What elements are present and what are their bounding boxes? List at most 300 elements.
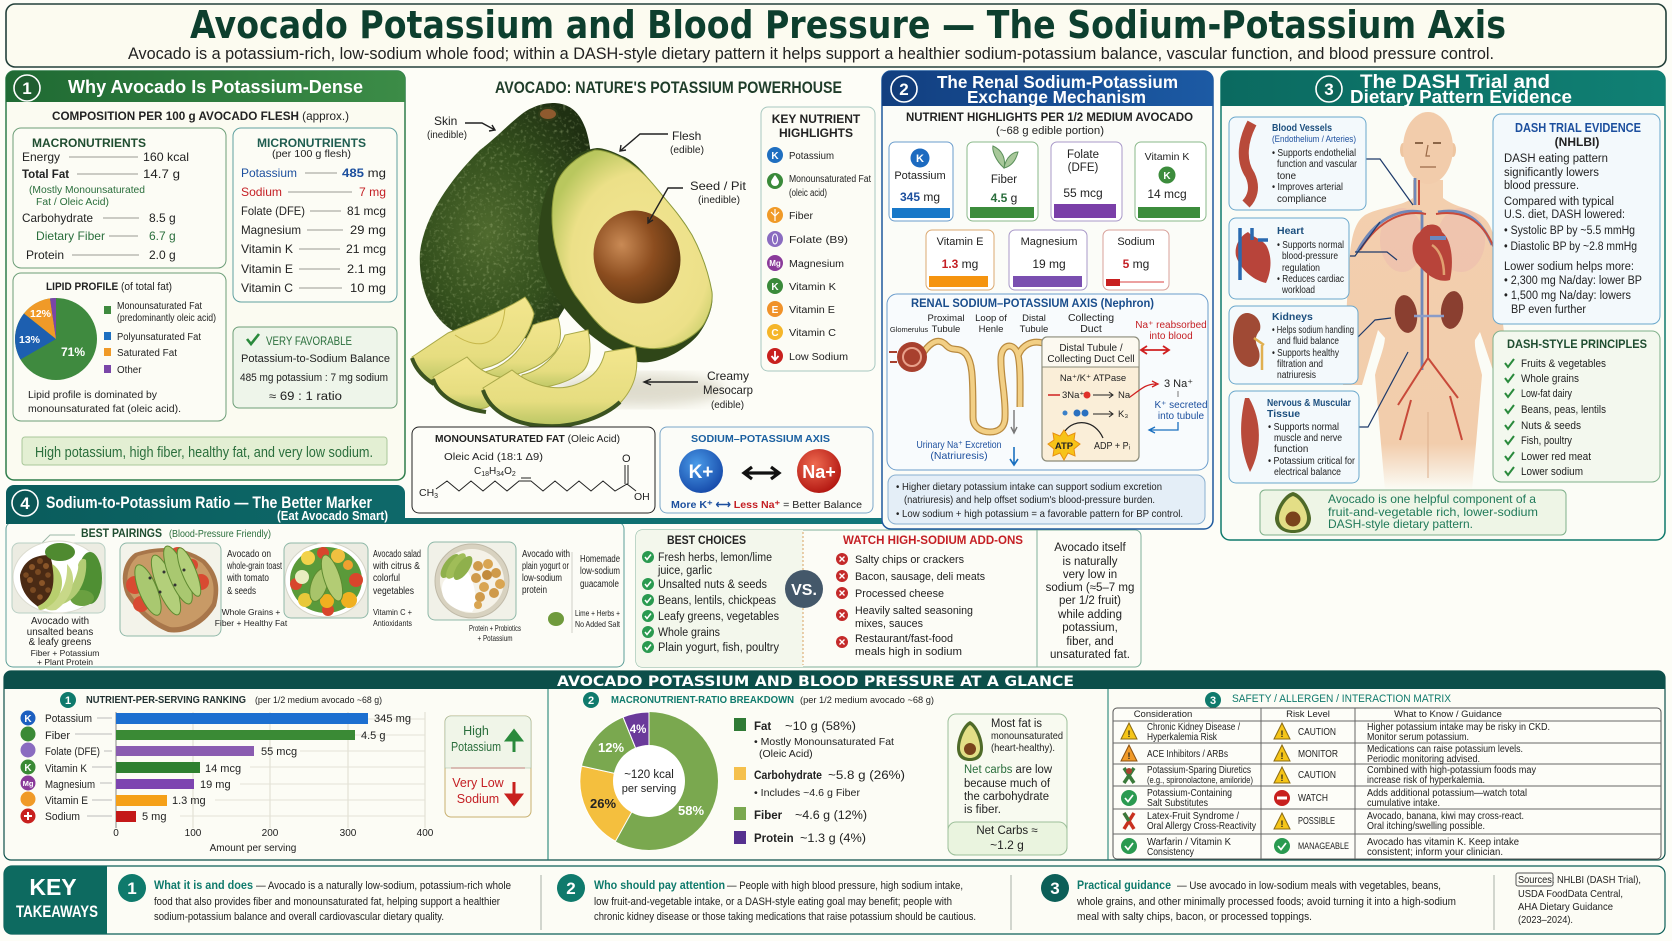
- safety matrix table: Consideration: [1134, 709, 1192, 720]
- avocado illustration: [412, 103, 725, 426]
- DASH-style principles: Fish, poultry: [1521, 435, 1572, 447]
- macronutrients table: 2.0 g: [149, 248, 176, 262]
- watch high-sodium list: WATCH HIGH-SODIUM ADD-ONS: [843, 535, 1023, 547]
- micronutrients table: (per 100 g flesh): [272, 148, 351, 160]
- icon: avocado: [957, 721, 983, 761]
- nephron diagram: Proximal: [928, 313, 964, 324]
- card: kidneys: • Supports healthy: [1272, 348, 1339, 359]
- card: heart: blood-pressure: [1282, 251, 1338, 262]
- card: blood vessels: [1229, 117, 1366, 210]
- food: beans, avocado and greens bowl: [12, 541, 105, 613]
- donut chart: macronutrients: 26%: [590, 796, 616, 811]
- avocado sodium note: per 1/2 fruit): [1059, 595, 1121, 607]
- card: nervous and muscular tissue: [1229, 391, 1359, 483]
- monounsaturated fat molecule: [412, 427, 655, 513]
- card: heart: [1229, 218, 1349, 299]
- card: potassium: [889, 142, 953, 221]
- macronutrients table: Energy: [22, 150, 60, 164]
- nutrient highlights heading: NUTRIENT HIGHLIGHTS PER 1/2 MEDIUM AVOCADO: [906, 110, 1193, 124]
- card: kidneys: and fluid balance: [1277, 336, 1339, 347]
- takeaway 1: [118, 874, 511, 923]
- row: salt substitutes: Adds additional potassium—watch total: [1367, 788, 1527, 799]
- bar chart: nutrients per serving: 300: [340, 828, 357, 839]
- DASH trial evidence card: (NHLBI): [1555, 135, 1599, 149]
- labels: ion movement: Urinary Na⁺ Excretion: [916, 439, 1002, 451]
- card: blood vessels: function and vascular: [1277, 159, 1358, 170]
- macronutrients table: Fat / Oleic Acid): [36, 197, 109, 208]
- caption: yogurt: plain yogurt or: [522, 561, 570, 572]
- avocado pattern banner: DASH-style dietary pattern.: [1328, 517, 1473, 531]
- labels: ion movement: into blood: [1149, 331, 1193, 342]
- safety matrix table: [1113, 708, 1661, 859]
- lipid profile pie chart: 13%: [19, 334, 41, 346]
- net carbs callout: Net Carbs ≈: [976, 825, 1038, 837]
- icon: ATP burst: ATP: [1055, 441, 1074, 452]
- key nutrient highlights: Potassium: [789, 151, 834, 162]
- nephron diagram: Loop of: [975, 313, 1007, 324]
- panel 3 header: Dietary Pattern Evidence: [1350, 86, 1572, 107]
- row: ACE inhibitors: MONITOR: [1298, 749, 1338, 760]
- net carbs callout: the carbohydrate: [964, 791, 1049, 803]
- row: salt substitutes: Salt Substitutes: [1147, 798, 1208, 809]
- nutrient ranking heading: (per 1/2 medium avocado ~68 g): [255, 695, 382, 706]
- row: ACE inhibitors: [1121, 744, 1523, 765]
- net carbs callout: monounsaturated: [991, 730, 1063, 742]
- connector lines to body: [1350, 159, 1413, 427]
- safety matrix heading: [1205, 692, 1452, 708]
- nutrient highlights heading: [906, 110, 1193, 137]
- row: latex-fruit syndrome: Oral itching/swelling possible.: [1367, 821, 1485, 832]
- very favorable ratio callout: Potassium-to-Sodium Balance: [241, 353, 390, 365]
- lipid profile pie chart: Monounsaturated Fat: [117, 301, 202, 312]
- caption: bowl: + Plant Protein: [37, 657, 93, 667]
- panel 3 header: [1221, 71, 1665, 107]
- lipid profile pie chart: (predominantly oleic acid): [117, 313, 216, 324]
- caption: salad: with citrus &: [372, 561, 420, 572]
- avocado sodium note: very low in: [1063, 569, 1117, 581]
- avocado pattern banner: [1260, 490, 1566, 535]
- monounsaturated fat molecule: 2: [512, 471, 516, 478]
- nephron diagram: Tubule: [932, 324, 960, 335]
- DASH-style principles: Beans, peas, lentils: [1521, 404, 1606, 416]
- micronutrients table: Sodium: [241, 185, 282, 199]
- card: nervous and muscular tissue: • Potassium critical for: [1268, 456, 1356, 467]
- bar chart: nutrients per serving: 5 mg: [142, 811, 166, 823]
- icon: vitamin K: [767, 278, 783, 294]
- macronutrient heading: (per 1/2 medium avocado ~68 g): [800, 695, 934, 706]
- very favorable ratio callout: ≈ 69 : 1 ratio: [269, 391, 342, 403]
- sodium-potassium axis: More K⁺ ⟷ Less Na⁺ = Better Balance: [671, 499, 862, 511]
- micronutrients table: 2.1 mg: [347, 262, 386, 276]
- card: kidneys: [1229, 306, 1358, 384]
- caption: salad: Antioxidants: [373, 618, 412, 628]
- key nutrient highlights: Low Sodium: [789, 352, 848, 363]
- caption: guacamole: Lime + Herbs +: [575, 608, 620, 618]
- DASH-style principles: Lower sodium: [1521, 466, 1583, 478]
- donut legend: • Includes ~4.6 g Fiber: [754, 787, 860, 799]
- panel 3 header: The DASH Trial and: [1360, 72, 1550, 93]
- macronutrients table: (Mostly Monounsaturated: [29, 185, 145, 196]
- title block: Avocado Potassium and Blood Pressure — The Sodium-Potassium Axis: [190, 3, 1506, 47]
- caption: toast: & seeds: [227, 586, 256, 597]
- high potassium / very low sodium callout: Very Low: [452, 776, 505, 790]
- monounsaturated fat molecule: Oleic Acid (18:1 Δ9): [444, 451, 543, 463]
- caption: yogurt: [469, 549, 570, 643]
- collecting duct cell: Collecting Duct Cell: [1047, 354, 1135, 365]
- takeaway 2: [557, 874, 976, 923]
- watch high-sodium list: [836, 535, 1023, 658]
- lipid profile pie chart: LIPID PROFILE (of total fat): [46, 281, 172, 293]
- card: vitamin K: K: [1163, 171, 1171, 182]
- card: potassium: Potassium: [894, 170, 946, 182]
- macronutrients table: 160 kcal: [143, 150, 189, 164]
- net carbs callout: because much of: [964, 778, 1051, 790]
- nutrient highlights heading: (~68 g edible portion): [996, 125, 1104, 137]
- best choices list: Whole grains: [658, 627, 720, 639]
- micronutrients table: Potassium: [241, 166, 297, 180]
- row: potassium-sparing diuretics: Potassium-Sparing Diuretics: [1147, 765, 1251, 776]
- donut legend: ~1.3 g (4%): [800, 833, 866, 845]
- row: chronic kidney disease: [1121, 722, 1550, 743]
- card: nervous and muscular tissue: function: [1274, 444, 1308, 455]
- best pairings heading: (Blood-Pressure Friendly): [169, 528, 271, 540]
- takeaway 1: sodium-potassium balance and overall cardiovascular dietary quality.: [154, 911, 444, 923]
- net carbs callout: Most fat is: [991, 718, 1042, 730]
- panel 1 header: [6, 71, 405, 102]
- card: fiber: [967, 142, 1038, 221]
- monounsaturated fat molecule: O: [622, 453, 631, 465]
- macronutrients table: 6.7 g: [149, 229, 176, 243]
- anatomy labels: Mesocarp: [703, 383, 753, 397]
- collecting duct cell: [1042, 337, 1139, 461]
- nephron diagram: RENAL SODIUM–POTASSIUM AXIS (Nephron): [911, 296, 1154, 310]
- row: salt substitutes: cumulative intake.: [1367, 798, 1440, 809]
- watch high-sodium list: Processed cheese: [855, 588, 944, 600]
- micronutrients table: Vitamin C: [241, 281, 293, 295]
- green summary banner: [22, 437, 387, 465]
- row: chronic kidney disease: Monitor serum potassium.: [1367, 732, 1469, 743]
- bar chart: nutrients per serving: Fiber: [45, 730, 70, 742]
- micronutrients table: 7 mg: [359, 185, 386, 199]
- micronutrients table: Vitamin E: [241, 262, 293, 276]
- caption: yogurt: low-sodium: [522, 573, 562, 584]
- macronutrient heading: 2: [588, 695, 594, 707]
- safety matrix table: Risk Level: [1286, 709, 1330, 720]
- lipid profile pie chart: [13, 273, 226, 421]
- monounsaturated fat molecule: C: [474, 466, 481, 477]
- icon: potassium: [767, 147, 783, 163]
- caption: bowl: Fiber + Potassium: [31, 648, 99, 658]
- sources: AHA Dietary Guidance: [1518, 901, 1613, 913]
- DASH trial evidence card: [1493, 114, 1660, 324]
- row: latex-fruit syndrome: Oral Allergy Cross-Reactivity: [1147, 821, 1256, 832]
- caption: toast: Avocado on: [227, 549, 271, 560]
- collecting duct cell: Na⁺/K⁺ ATPase: [1060, 373, 1126, 384]
- key nutrient highlights: Magnesium: [789, 259, 844, 270]
- nephron diagram: Duct: [1080, 323, 1102, 335]
- icon: magnesium: Mg: [769, 259, 781, 268]
- donut legend: Fat: [754, 721, 771, 733]
- card: kidneys: • Helps sodium handling: [1272, 325, 1354, 336]
- card: nervous and muscular tissue: Nervous & Muscular: [1267, 397, 1351, 409]
- micronutrients table: 81 mcg: [347, 204, 386, 218]
- donut legend: • Mostly Monounsaturated Fat: [754, 736, 894, 748]
- row: salt substitutes: WATCH: [1298, 793, 1328, 804]
- best choices list: Leafy greens, vegetables: [658, 611, 779, 623]
- icon: vitamin K: K: [771, 282, 779, 293]
- avocado sodium note: [1046, 542, 1134, 661]
- icon: Na+: [797, 449, 841, 493]
- DASH trial evidence card: DASH eating pattern: [1504, 153, 1608, 165]
- card: vitamin K: [1135, 142, 1206, 221]
- DASH trial evidence card: • 2,300 mg Na/day: lower BP: [1504, 275, 1642, 287]
- bar chart: nutrients per serving: K: [24, 714, 32, 725]
- anatomy labels: (edible): [670, 145, 704, 156]
- card: heart: workload: [1281, 285, 1315, 296]
- net carbs callout: Net carbs are low: [964, 764, 1053, 776]
- bar chart: nutrients per serving: Folate (DFE): [45, 746, 100, 758]
- sources: (2023–2024).: [1518, 914, 1573, 926]
- monounsaturated fat molecule: MONOUNSATURATED FAT (Oleic Acid): [435, 433, 620, 445]
- caption: toast: with tomato: [226, 573, 269, 584]
- very favorable ratio callout: 485 mg potassium : 7 mg sodium: [240, 372, 388, 384]
- bar chart: nutrients per serving: 55 mcg: [261, 746, 297, 758]
- DASH trial evidence card: significantly lowers: [1504, 167, 1599, 179]
- bar chart: nutrients per serving: Potassium: [45, 713, 92, 725]
- bar chart: nutrients per serving: 0: [113, 828, 119, 839]
- bar chart: nutrients per serving: Magnesium: [45, 779, 95, 791]
- VS badge: VS.: [791, 582, 817, 599]
- caption: guacamole: [548, 552, 621, 633]
- donut chart: macronutrients: per serving: [622, 783, 676, 795]
- icon: vitamin C: [767, 324, 783, 340]
- row: ACE inhibitors: Periodic monitoring advised.: [1367, 754, 1480, 765]
- takeaway 3: meal with salty chips, bacon, or processed toppings.: [1077, 911, 1312, 923]
- very favorable ratio callout: [233, 327, 397, 408]
- lipid profile pie chart: Lipid profile is dominated by: [28, 389, 158, 401]
- row: chronic kidney disease: Hyperkalemia Risk: [1147, 732, 1217, 743]
- avocado pattern banner: Avocado is one helpful component of a: [1328, 492, 1536, 506]
- anatomy labels: Creamy: [707, 369, 749, 383]
- takeaway 3: [1041, 874, 1456, 923]
- bar chart: nutrients per serving: 19 mg: [200, 779, 231, 791]
- best pairings heading: [42, 526, 271, 543]
- caption: guacamole: Homemade: [580, 554, 620, 565]
- safety matrix heading: 3: [1210, 695, 1216, 707]
- card: sodium: [1103, 230, 1169, 290]
- lipid profile pie chart: Polyunsaturated Fat: [117, 332, 201, 343]
- card: nervous and muscular tissue: • Supports normal: [1268, 422, 1339, 433]
- card: vitamin E: 1.3 mg: [942, 257, 978, 271]
- safety matrix table: What to Know / Guidance: [1394, 709, 1502, 720]
- card: potassium: 345 mg: [900, 190, 940, 204]
- sources: USDA FoodData Central,: [1518, 888, 1623, 900]
- row: latex-fruit syndrome: POSSIBLE: [1298, 816, 1335, 827]
- watch high-sodium list: Salty chips or crackers: [855, 554, 964, 566]
- caption: toast: Fiber + Healthy Fat: [215, 618, 288, 628]
- net carbs callout: [948, 714, 1067, 855]
- row: chronic kidney disease: CAUTION: [1298, 727, 1336, 738]
- labels: ion movement: [916, 320, 1208, 465]
- card: vitamin K: 14 mcg: [1147, 187, 1187, 201]
- donut chart: macronutrients: ~120 kcal: [624, 769, 674, 781]
- DASH trial evidence card: • Systolic BP by ~5.5 mmHg: [1504, 225, 1635, 237]
- key takeaways label: TAKEAWAYS: [16, 902, 98, 921]
- nephron diagram: Tubule: [1020, 324, 1048, 335]
- panel 1: why avocado is potassium-dense: [6, 71, 405, 480]
- icon: muscle: [1241, 398, 1259, 472]
- takeaway 2: Who should pay attention: [594, 880, 725, 892]
- labels: ion movement: (Natriuresis): [930, 450, 988, 462]
- donut chart: macronutrients: [580, 712, 718, 850]
- row: latex-fruit syndrome: Avocado, banana, kiwi may cross-react.: [1367, 811, 1524, 822]
- key nutrient highlights: Vitamin K: [789, 282, 836, 293]
- monounsaturated fat molecule: 18: [481, 471, 489, 478]
- card: kidneys: natriuresis: [1277, 370, 1316, 381]
- net carbs callout: is fiber.: [964, 804, 1001, 816]
- nephron diagram: Collecting: [1068, 312, 1114, 324]
- card: blood vessels: Blood Vessels: [1272, 122, 1332, 134]
- card: magnesium: Magnesium: [1021, 236, 1077, 248]
- card: nervous and muscular tissue: electrical balance: [1274, 467, 1341, 478]
- lipid profile pie chart: Other: [117, 365, 142, 376]
- key nutrient highlights: Monounsaturated Fat: [789, 174, 871, 185]
- avocado pattern banner: fruit-and-vegetable rich, lower-sodium: [1328, 505, 1538, 519]
- avocado sodium note: Avocado itself: [1054, 542, 1126, 554]
- food: avocado toast: [120, 543, 221, 636]
- caption: bowl: unsalted beans: [27, 627, 93, 638]
- card: vitamin E: [926, 230, 994, 290]
- macronutrient heading: MACRONUTRIENT-RATIO BREAKDOWN: [611, 694, 794, 706]
- panel 2 header: [882, 71, 1213, 107]
- donut chart: macronutrients: 58%: [678, 803, 704, 818]
- card: heart: • Reduces cardiac: [1277, 274, 1344, 285]
- card: blood vessels: • Supports endothelial: [1272, 148, 1356, 159]
- card: nervous and muscular tissue: Tissue: [1267, 408, 1300, 420]
- macronutrient heading: [583, 692, 934, 708]
- card: kidneys: Kidneys: [1272, 311, 1313, 323]
- row: chronic kidney disease: Chronic Kidney Disease /: [1147, 722, 1240, 733]
- caption: guacamole: low-sodium: [580, 566, 620, 577]
- card: nervous and muscular tissue: muscle and nerve: [1274, 433, 1342, 444]
- takeaway 2: low fruit-and-vegetable intake, or a DASH-style eating goal may benefit; people with: [594, 896, 952, 908]
- icon: monounsaturated fat: [767, 173, 783, 189]
- bar chart: nutrients per serving: 200: [262, 828, 279, 839]
- macronutrients table: [13, 128, 226, 268]
- DASH trial evidence card: BP even further: [1511, 304, 1586, 316]
- panel: best choices vs high-sodium add-ons: [636, 530, 1141, 667]
- avocado sodium note: sodium (≈5–7 mg: [1046, 582, 1134, 594]
- best choices list: Beans, lentils, chickpeas: [658, 595, 776, 607]
- icon: heart: [1236, 228, 1270, 283]
- card: sodium: Sodium: [1117, 236, 1155, 248]
- best choices list: [642, 533, 779, 654]
- takeaway 3: whole grains, and other minimally processed foods; avoid turning it into a high-sodium: [1076, 896, 1456, 908]
- row: latex-fruit syndrome: !: [1280, 819, 1284, 829]
- avocado sodium note: while adding: [1057, 609, 1122, 621]
- icon: kidney: [1233, 313, 1264, 370]
- row: ACE inhibitors: Medications can raise potassium levels.: [1367, 744, 1523, 755]
- micronutrients table: 10 mg: [350, 281, 386, 295]
- monounsaturated fat molecule: H: [489, 466, 496, 477]
- DASH trial evidence card: • 1,500 mg Na/day: lowers: [1504, 290, 1631, 302]
- DASH trial evidence card: DASH TRIAL EVIDENCE: [1515, 121, 1641, 135]
- panel 3: DASH trial evidence: [1221, 71, 1665, 540]
- caption: toast: [215, 549, 288, 628]
- row: chronic kidney disease: !: [1280, 729, 1284, 739]
- caption: salad: [372, 549, 421, 628]
- DASH-style principles: Low-fat dairy: [1521, 388, 1572, 400]
- card: sodium: 5 mg: [1123, 257, 1149, 271]
- macronutrients table: 8.5 g: [149, 211, 176, 225]
- monounsaturated fat molecule: CH: [419, 487, 434, 499]
- row: potassium-sparing diuretics: increase risk of hyperkalemia.: [1367, 775, 1485, 786]
- caption: salad: colorful: [373, 573, 400, 584]
- bar chart: nutrients per serving: 14 mcg: [205, 763, 241, 775]
- micronutrients table: 485 mg: [342, 166, 386, 180]
- panel: at a glance: [4, 671, 1665, 860]
- lipid profile pie chart: 71%: [61, 345, 85, 359]
- icon: vitamin C: C: [771, 328, 779, 339]
- donut legend: [734, 718, 905, 845]
- food: citrus salad: [284, 543, 368, 618]
- card: folate: Folate: [1067, 149, 1099, 161]
- nephron diagram: [887, 294, 1208, 470]
- very favorable ratio callout: VERY FAVORABLE: [266, 336, 352, 348]
- macronutrients table: Carbohydrate: [22, 211, 93, 225]
- sodium-potassium axis: SODIUM–POTASSIUM AXIS: [691, 433, 830, 445]
- row: latex-fruit syndrome: [1124, 811, 1524, 832]
- takeaway 1: What it is and does: [154, 880, 253, 892]
- panel 2 header: 2: [899, 80, 909, 99]
- donut legend: ~5.8 g (26%): [828, 770, 905, 782]
- bar chart: nutrients per serving: Vitamin E: [45, 795, 88, 807]
- card: vitamin K: Vitamin K: [1145, 151, 1189, 163]
- icon: K+: [679, 449, 723, 493]
- panel 1 header: Why Avocado Is Potassium-Dense: [68, 76, 363, 97]
- card: folate: [1051, 142, 1122, 221]
- takeaway 2: 2: [566, 879, 576, 898]
- high potassium / very low sodium callout: Sodium: [457, 792, 499, 806]
- caption: toast: Whole Grains +: [222, 607, 280, 617]
- watch high-sodium list: Restaurant/fast-food: [855, 633, 953, 645]
- donut legend: Fiber: [754, 810, 783, 822]
- panel 4: sodium-to-potassium ratio: [6, 485, 885, 667]
- card: heart: Heart: [1277, 225, 1304, 237]
- row: salt substitutes: Potassium-Containing: [1147, 788, 1232, 799]
- nephron diagram: Distal: [1022, 313, 1046, 324]
- anatomy labels: Skin: [434, 114, 457, 128]
- half avocado: [538, 148, 712, 362]
- bar chart: nutrients per serving: Vitamin K: [45, 763, 88, 775]
- key nutrient highlights: KEY NUTRIENT: [772, 112, 861, 126]
- key nutrient highlights: Fiber: [789, 211, 814, 222]
- card: magnesium: 19 mg: [1032, 257, 1066, 271]
- row: warfarin: Consistency: [1147, 847, 1194, 858]
- monounsaturated fat molecule: OH: [634, 491, 650, 503]
- donut legend: (Oleic Acid): [759, 748, 813, 760]
- row: warfarin: [1121, 837, 1520, 858]
- card: blood vessels: • Improves arterial: [1272, 182, 1343, 193]
- nutrient ranking heading: NUTRIENT-PER-SERVING RANKING: [86, 694, 246, 706]
- row: potassium-sparing diuretics: Combined with high-potassium foods may: [1367, 765, 1536, 776]
- icon: low sodium: [767, 348, 783, 364]
- row: ACE inhibitors: ACE Inhibitors / ARBs: [1147, 749, 1228, 760]
- caption: bowl: & leafy greens: [29, 637, 91, 648]
- donut chart: macronutrients: 12%: [598, 740, 624, 755]
- row: ACE inhibitors: !: [1280, 751, 1284, 761]
- row: latex-fruit syndrome: Latex-Fruit Syndrome /: [1147, 811, 1239, 822]
